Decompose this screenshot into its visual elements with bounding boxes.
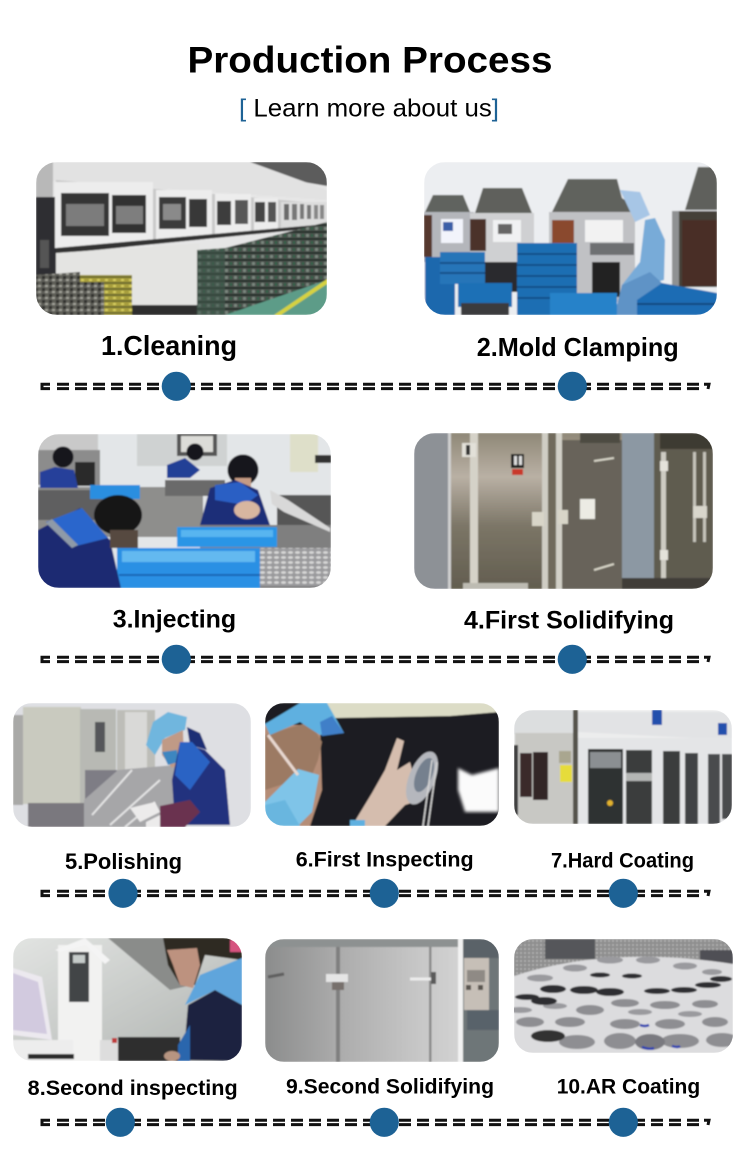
timeline: row 4 [42, 1108, 709, 1137]
panel: step 8 second inspecting [13, 938, 242, 1100]
step node 3 [162, 645, 191, 674]
step node 1 [162, 372, 191, 401]
label: 5.Polishing: 5.Polishing [65, 849, 182, 874]
photo: cleaning line [36, 162, 327, 315]
step node 7 [609, 879, 638, 908]
photo: oven doors [414, 433, 713, 589]
panel: step 10 ar coating [508, 939, 738, 1098]
step node 10 [609, 1108, 638, 1137]
photo: second inspecting [13, 938, 242, 1061]
panel: step 7 hard coating [514, 710, 732, 872]
dashed rail [42, 1119, 709, 1126]
photo: hard coating machine [514, 710, 732, 824]
panel: step 3 injecting [38, 434, 331, 634]
panel: step 1 cleaning [36, 162, 327, 361]
panel: step 4 first solidifying [414, 433, 713, 634]
step node 6 [370, 879, 399, 908]
step node 5 [108, 879, 138, 908]
label: 2.Mold Clamping: 2.Mold Clamping [477, 332, 679, 362]
timeline: row 1 [42, 372, 709, 401]
photo: mold clamping machines [424, 162, 717, 315]
step node 4 [558, 645, 587, 674]
photo: inspecting a lens [265, 703, 499, 826]
panel: step 9 second solidifying [265, 939, 499, 1098]
label: 7.Hard Coating: 7.Hard Coating [551, 849, 694, 872]
step node 8 [106, 1108, 135, 1137]
label: 3.Injecting: 3.Injecting [113, 606, 236, 634]
label: 4.First Solidifying: 4.First Solidifying [464, 606, 674, 634]
panel: step 2 mold clamping [424, 162, 717, 362]
dashed rail [42, 656, 709, 663]
dashed rail [42, 383, 709, 390]
step node 9 [370, 1108, 399, 1137]
label: 10.AR Coating: 10.AR Coating [557, 1075, 700, 1098]
photo: polishing worker [13, 703, 251, 827]
photo: lens dome [508, 939, 738, 1053]
photo: oven doors [265, 939, 499, 1062]
label: 8.Second inspecting: 8.Second inspecting [28, 1076, 238, 1100]
panel: step 5 polishing [13, 703, 251, 874]
step node 2 [558, 372, 587, 401]
label: 6.First Inspecting: 6.First Inspecting [296, 847, 474, 871]
title: Production Process [188, 40, 552, 80]
timeline: row 3 [42, 879, 709, 908]
dashed rail [42, 890, 709, 897]
label: 9.Second Solidifying: 9.Second Solidifying [286, 1075, 494, 1098]
timeline: row 2 [42, 645, 709, 674]
subtitle: [ Learn more about us ] [239, 95, 499, 123]
panel: step 6 first inspecting [265, 703, 499, 871]
label: 1.Cleaning: 1.Cleaning [101, 330, 237, 361]
photo: workers injecting [38, 434, 331, 588]
